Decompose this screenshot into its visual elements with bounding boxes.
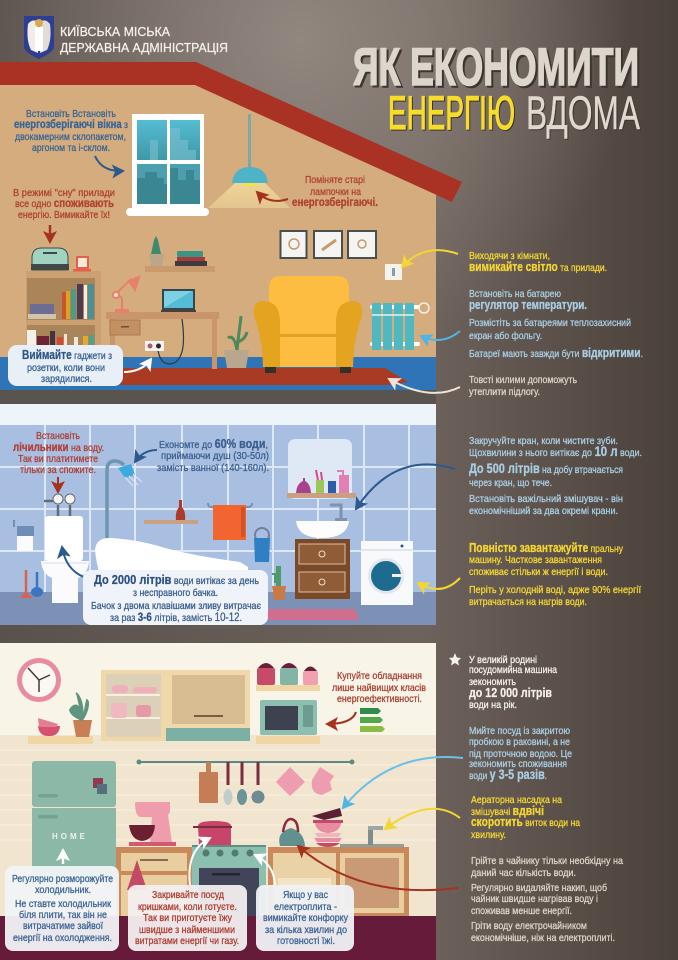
tip: kettle: даний час кількість води. bbox=[471, 867, 576, 879]
callout: electric stove bbox=[256, 885, 354, 951]
tip: radiators: Встановіть на батарею bbox=[469, 288, 561, 300]
arrow: to pot bbox=[189, 838, 210, 885]
wall bbox=[0, 83, 436, 392]
callout: unplug gadgets: зарядилися. bbox=[41, 373, 92, 385]
stove bbox=[192, 845, 266, 916]
fridge: HOME bbox=[52, 832, 86, 841]
lamp bbox=[208, 114, 290, 208]
upper light band bbox=[0, 404, 436, 425]
tip: radiators: екран або фольгу. bbox=[469, 330, 542, 342]
tip: carpets: утеплити підлогу. bbox=[469, 386, 540, 398]
tip: taps: Встановіть важільний змішувач - він bbox=[469, 493, 623, 505]
callout: leaking cistern: До 2000 літрів води витікає за день bbox=[94, 572, 259, 587]
picture frames bbox=[280, 231, 376, 258]
callout: pot lids: кришками, коли готуєте. bbox=[138, 901, 237, 913]
text: shower bbox=[157, 437, 269, 474]
arrow: to cistern bbox=[62, 547, 84, 577]
sink bbox=[296, 505, 349, 538]
radiator bbox=[370, 303, 429, 350]
tip: taps: Закручуйте кран, коли чистите зуби. bbox=[469, 435, 618, 447]
armchair bbox=[254, 276, 362, 373]
text: windows: аргоном та і-склом. bbox=[32, 142, 110, 154]
arrow: to faucet bbox=[356, 464, 455, 509]
tip: aerator: скоротить виток води на bbox=[471, 815, 580, 829]
logo text: КИЇВСЬКА МІСЬКА bbox=[60, 24, 170, 39]
tip: aerator: хвилину. bbox=[471, 829, 506, 841]
blue towel bbox=[254, 528, 270, 562]
text: windows: енергозберігаючі вікна з bbox=[14, 119, 128, 131]
arrow: to rug bbox=[389, 379, 460, 393]
wall clock bbox=[17, 658, 61, 702]
text: energy class: Купуйте обладнання bbox=[337, 670, 422, 682]
tip: dishwasher: У великій родині bbox=[469, 654, 537, 666]
text column: bathroom tips bbox=[469, 435, 642, 608]
tip: lights: вимикайте світло та прилади. bbox=[469, 260, 607, 274]
callout: leaking cistern: за раз 3-6 літрів, замість 10-12. bbox=[110, 612, 242, 624]
floor bbox=[0, 592, 436, 625]
tip: kettle bbox=[471, 855, 623, 944]
arrow: to socket bbox=[124, 359, 151, 372]
arrow: to burner bbox=[255, 855, 275, 885]
tip: washing dishes: Мийте посуд із закритою bbox=[469, 725, 570, 737]
callout: electric stove: Якщо у вас bbox=[283, 889, 328, 901]
callout: fridge: холодильник. bbox=[35, 884, 91, 896]
text: energy class bbox=[332, 670, 426, 705]
text: energy class: енергоефективності. bbox=[337, 693, 422, 705]
plunger and brush bbox=[20, 570, 43, 598]
tip: washing dishes: пробкою в раковині, а не bbox=[469, 736, 570, 748]
text: energy class: лише найвищих класів bbox=[332, 682, 426, 694]
text: meters: тільки за спожите. bbox=[20, 464, 96, 476]
shelf with bowls and plant bbox=[28, 693, 93, 744]
tip: radiators: регулятор температури. bbox=[469, 298, 587, 312]
tip: aerator: змішувачі вдвічі bbox=[471, 804, 544, 818]
text: bulbs: лампочки на bbox=[310, 186, 361, 198]
washing machine bbox=[361, 541, 413, 605]
text: windows: Встановіть Встановіть bbox=[26, 108, 116, 120]
shelf with plant and books bbox=[145, 236, 215, 272]
arrow: to window bbox=[95, 156, 123, 171]
tip: aerator bbox=[471, 794, 580, 841]
text: shower: приймаючи душ (30-50л) bbox=[161, 450, 269, 462]
panel: living room bbox=[0, 62, 462, 404]
arrow: to kettle bbox=[298, 846, 458, 890]
tip: taps bbox=[469, 435, 642, 517]
text column: kitchen tips bbox=[449, 653, 623, 944]
tip: radiators: Батареї мають завжди бути відкритими. bbox=[469, 346, 643, 360]
text: windows: двокамерним склопакетом, bbox=[15, 131, 126, 143]
alarm clock bbox=[73, 256, 91, 272]
rug bbox=[120, 368, 408, 385]
callout: fridge: біля плити, так він не bbox=[19, 909, 107, 921]
arrow: to shower bbox=[135, 450, 157, 462]
title: ЕНЕРГІЮ bbox=[389, 87, 516, 140]
tip: lights bbox=[469, 250, 607, 274]
callout: pot lids: швидше з найменшими bbox=[139, 924, 235, 936]
utensils bbox=[224, 762, 264, 805]
potted plant bbox=[224, 316, 249, 368]
cutting board bbox=[199, 762, 218, 803]
tip: kettle: споживав менше енергії. bbox=[471, 905, 572, 917]
shelf with vase bbox=[144, 500, 198, 524]
light switch bbox=[385, 264, 402, 280]
tip: dishwasher: зекономить bbox=[469, 676, 516, 688]
cable and socket bbox=[145, 319, 184, 364]
pot holder bbox=[276, 767, 305, 796]
tip: dishwasher: до 12 000 літрів bbox=[469, 685, 552, 700]
callout: unplug gadgets bbox=[8, 345, 123, 386]
tip: washing dishes: під проточною водою. Це bbox=[469, 748, 572, 760]
logo text: ДЕРЖАВНА АДМІНІСТРАЦІЯ bbox=[60, 40, 228, 55]
tip: washing machine: машину. Часткове завантаження bbox=[469, 554, 602, 566]
tip: washing machine: Періть у холодній воді, адже 90% енергії bbox=[469, 584, 641, 596]
counter left bbox=[116, 847, 192, 916]
wall cabinet bbox=[166, 670, 250, 741]
fridge bbox=[32, 761, 116, 883]
tip: kettle: економічніше, ніж на електроплиті. bbox=[471, 932, 615, 944]
tip: radiators: Розмістіть за батареями теплозахисний bbox=[469, 317, 631, 329]
text: bulbs bbox=[292, 174, 378, 209]
panel: kitchen bbox=[0, 643, 463, 960]
tip: washing dishes: зекономить споживання bbox=[469, 758, 567, 770]
water meters bbox=[44, 494, 75, 516]
laptop bbox=[161, 289, 196, 312]
pot bbox=[193, 821, 232, 845]
toilet paper holder bbox=[14, 520, 34, 551]
arrow: to microwave bbox=[327, 712, 356, 724]
tip: taps: До 500 літрів на добу втрачається bbox=[469, 461, 623, 476]
title: ЕНЕРГІЮ bbox=[388, 86, 515, 139]
panel: bathroom bbox=[0, 404, 460, 625]
callout: fridge bbox=[5, 866, 119, 951]
shelf with canisters bbox=[256, 663, 320, 691]
text: windows bbox=[14, 108, 128, 154]
utensil rail bbox=[136, 760, 354, 764]
callout: pot lids: Закривайте посуд bbox=[152, 889, 224, 901]
callout: electric stove: готовності їжі. bbox=[277, 935, 335, 947]
counter right bbox=[268, 844, 409, 916]
logo text bbox=[60, 24, 228, 55]
text: shower: Економте до 60% води, bbox=[159, 437, 268, 451]
tip: radiators bbox=[469, 288, 643, 360]
tiled wall bbox=[0, 425, 436, 593]
text: meters bbox=[13, 430, 104, 476]
floor bbox=[0, 357, 436, 404]
tip: aerator: Аераторна насадка на bbox=[471, 794, 562, 806]
tip: washing dishes bbox=[469, 725, 572, 782]
desk bbox=[106, 312, 219, 369]
tip: washing dishes: води у 3-5 разів. bbox=[469, 767, 547, 782]
arrow: to kitchen faucet bbox=[385, 809, 460, 829]
callout: pot lids bbox=[128, 885, 247, 951]
toilet bbox=[41, 516, 89, 603]
text: meters: лічильники на воду. bbox=[13, 442, 104, 454]
tip: washing machine bbox=[469, 541, 641, 608]
tip: taps: через кран, що тече. bbox=[469, 477, 552, 489]
bathtub bbox=[95, 538, 248, 592]
oven mitt bbox=[312, 767, 334, 795]
callout: fridge: Не ставте холодильник bbox=[15, 898, 111, 910]
tip: carpets: Товсті килими допоможуть bbox=[469, 374, 577, 386]
arrow: to bulb bbox=[257, 192, 288, 201]
tip: washing machine: споживає стільки ж енергії і води. bbox=[469, 566, 608, 578]
stand mixer bbox=[129, 802, 176, 846]
text: standby: все одно споживають bbox=[15, 198, 114, 210]
mirror bbox=[287, 439, 356, 499]
callout: fridge: витрачатиме зайвої bbox=[23, 920, 103, 932]
text: standby: В режимі "сну" прилади bbox=[13, 187, 115, 199]
floor bbox=[0, 916, 436, 960]
tip: washing machine: витрачається на нагрів води. bbox=[469, 596, 587, 608]
tip: taps: Щохвилини з нього витікає до 10 л води. bbox=[469, 444, 642, 459]
tip: taps: економічніший за два окремі крани. bbox=[469, 505, 618, 517]
callout: electric stove: вимикайте конфорку bbox=[263, 912, 349, 924]
vanity cabinet bbox=[295, 539, 350, 599]
desk lamp bbox=[113, 277, 139, 312]
callout: pot lids: витратами енергії чи газу. bbox=[135, 935, 239, 947]
upper wall bbox=[0, 643, 436, 736]
callout: electric stove: за кілька хвилин до bbox=[265, 924, 347, 936]
callout: leaking cistern bbox=[83, 570, 268, 625]
tip: kettle: Грійте в чайнику тільки необхідну на bbox=[471, 855, 623, 867]
arrow: to radio bbox=[49, 225, 51, 242]
arrow: to meters bbox=[57, 477, 59, 492]
tip: carpets bbox=[469, 374, 577, 398]
text: standby: енергію. Вимикайте їх! bbox=[18, 209, 110, 221]
bookshelf bbox=[26, 271, 101, 361]
tip: lights: Виходячи з кімнати, bbox=[469, 250, 550, 262]
icon: coat of arms shield bbox=[24, 16, 54, 59]
title bbox=[353, 38, 641, 140]
energy class bars bbox=[360, 708, 385, 732]
text: bulbs: Поміняте старі bbox=[305, 174, 365, 186]
glass cabinet bbox=[101, 670, 166, 741]
arrow: to radiator bbox=[421, 331, 460, 340]
plate stack bbox=[312, 808, 343, 847]
tip: washing machine: Повністю завантажуйте пральну bbox=[469, 541, 624, 555]
callout: fridge: енергії на охолодження. bbox=[13, 932, 112, 944]
bath mat bbox=[260, 609, 359, 620]
tip: dishwasher bbox=[469, 654, 557, 711]
callout: pot lids: Так ви приготуєте їжу bbox=[143, 912, 233, 924]
tiled wall bbox=[0, 735, 436, 917]
arrow: to washer bbox=[418, 578, 460, 589]
arrow: to plates bbox=[343, 757, 463, 808]
cactus bbox=[272, 566, 286, 600]
callout: leaking cistern: з несправного бачка. bbox=[133, 587, 218, 599]
text: meters: Встановіть bbox=[36, 430, 80, 442]
arrow: to switch bbox=[402, 250, 458, 267]
window bbox=[126, 114, 209, 216]
kettle bbox=[279, 819, 305, 846]
tip: dishwasher: посудомийна машина bbox=[469, 664, 557, 676]
text: bulbs: енергозберігаючі. bbox=[292, 197, 378, 209]
tip: kettle: чайник швидше нагрівав воду і bbox=[471, 893, 598, 905]
callout: electric stove: електроплита - bbox=[274, 901, 337, 913]
text column: living room tips bbox=[469, 250, 643, 398]
callout: fridge: Регулярно розморожуйте bbox=[12, 873, 113, 885]
towel bbox=[208, 503, 252, 540]
tip: dishwasher: води на рік. bbox=[469, 699, 517, 711]
roof bbox=[0, 62, 462, 202]
arrow: to fridge bbox=[62, 850, 64, 864]
icon: star bbox=[449, 653, 461, 666]
microwave bbox=[256, 700, 320, 744]
callout: leaking cistern: Бачок з двома клавішами зливу витрачає bbox=[91, 600, 262, 612]
text: standby bbox=[13, 187, 115, 221]
faucet bbox=[368, 826, 383, 845]
radio bbox=[31, 248, 69, 270]
text: meters: Так ви платитимете bbox=[18, 453, 98, 465]
text: shower: замість ванної (140-160л). bbox=[157, 462, 269, 474]
tip: kettle: Гріти воду електрочайником bbox=[471, 920, 587, 932]
shower bbox=[107, 461, 142, 545]
callout: unplug gadgets: розетки, коли вони bbox=[27, 362, 105, 374]
tip: kettle: Регулярно видаляйте накип, щоб bbox=[471, 882, 607, 894]
logo: Kyiv city administration bbox=[24, 16, 228, 59]
callout: unplug gadgets: Виймайте гаджети з bbox=[22, 348, 112, 362]
